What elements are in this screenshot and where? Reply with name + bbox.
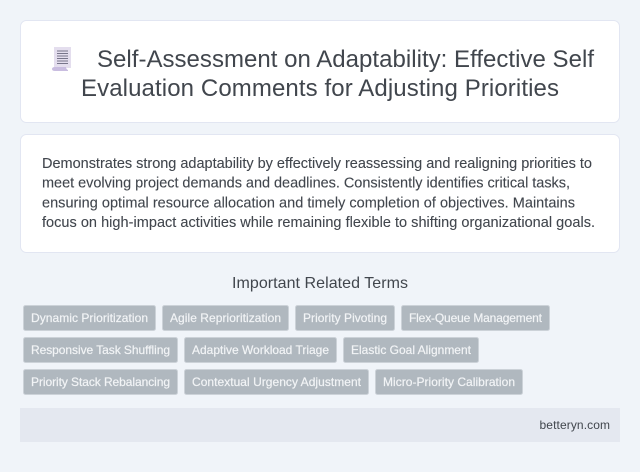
tag: Agile Reprioritization (170, 311, 281, 325)
tag (24, 306, 156, 330)
summary card (20, 134, 620, 252)
tag: Priority Stack Rebalancing (31, 375, 170, 389)
tag (184, 338, 336, 362)
tag (184, 370, 368, 394)
icon: document scroll (52, 47, 71, 71)
tag: Dynamic Prioritization (31, 311, 148, 325)
tag: Flex-Queue Management (409, 311, 543, 325)
tag: Contextual Urgency Adjustment (192, 375, 362, 389)
title: Evaluation Comments for Adjusting Priorities (81, 75, 559, 102)
tag: Priority Pivoting (303, 311, 387, 325)
title: Self-Assessment on Adaptability: Effective Self (97, 46, 594, 73)
tag (376, 370, 522, 394)
summary text: Demonstrates strong adaptability by effectively reassessing and realigning priorities to (42, 156, 592, 172)
section heading: Important Related Terms (232, 275, 408, 292)
tag: Responsive Task Shuffling (31, 343, 170, 357)
title (81, 46, 594, 102)
tag: Elastic Goal Alignment (351, 343, 472, 357)
tag (344, 338, 478, 362)
footer source text: betteryn.com (540, 418, 610, 432)
summary text: meet evolving project demands and deadlines. Consistently identifies critical tasks, (42, 176, 570, 192)
tag (296, 306, 394, 330)
tag (162, 306, 288, 330)
tag: Micro-Priority Calibration (383, 375, 515, 389)
summary text: ensuring optimal resource allocation and timely completion of objectives. Maintains (42, 196, 575, 212)
tag (24, 338, 178, 362)
tags (24, 306, 550, 394)
summary text (42, 156, 595, 231)
tag (402, 306, 550, 330)
footer (20, 408, 620, 442)
tag (24, 370, 178, 394)
summary text: focus on high-impact activities while remaining flexible to shifting organizational goals. (42, 215, 595, 231)
tag: Adaptive Workload Triage (192, 343, 329, 357)
header card (20, 20, 620, 122)
